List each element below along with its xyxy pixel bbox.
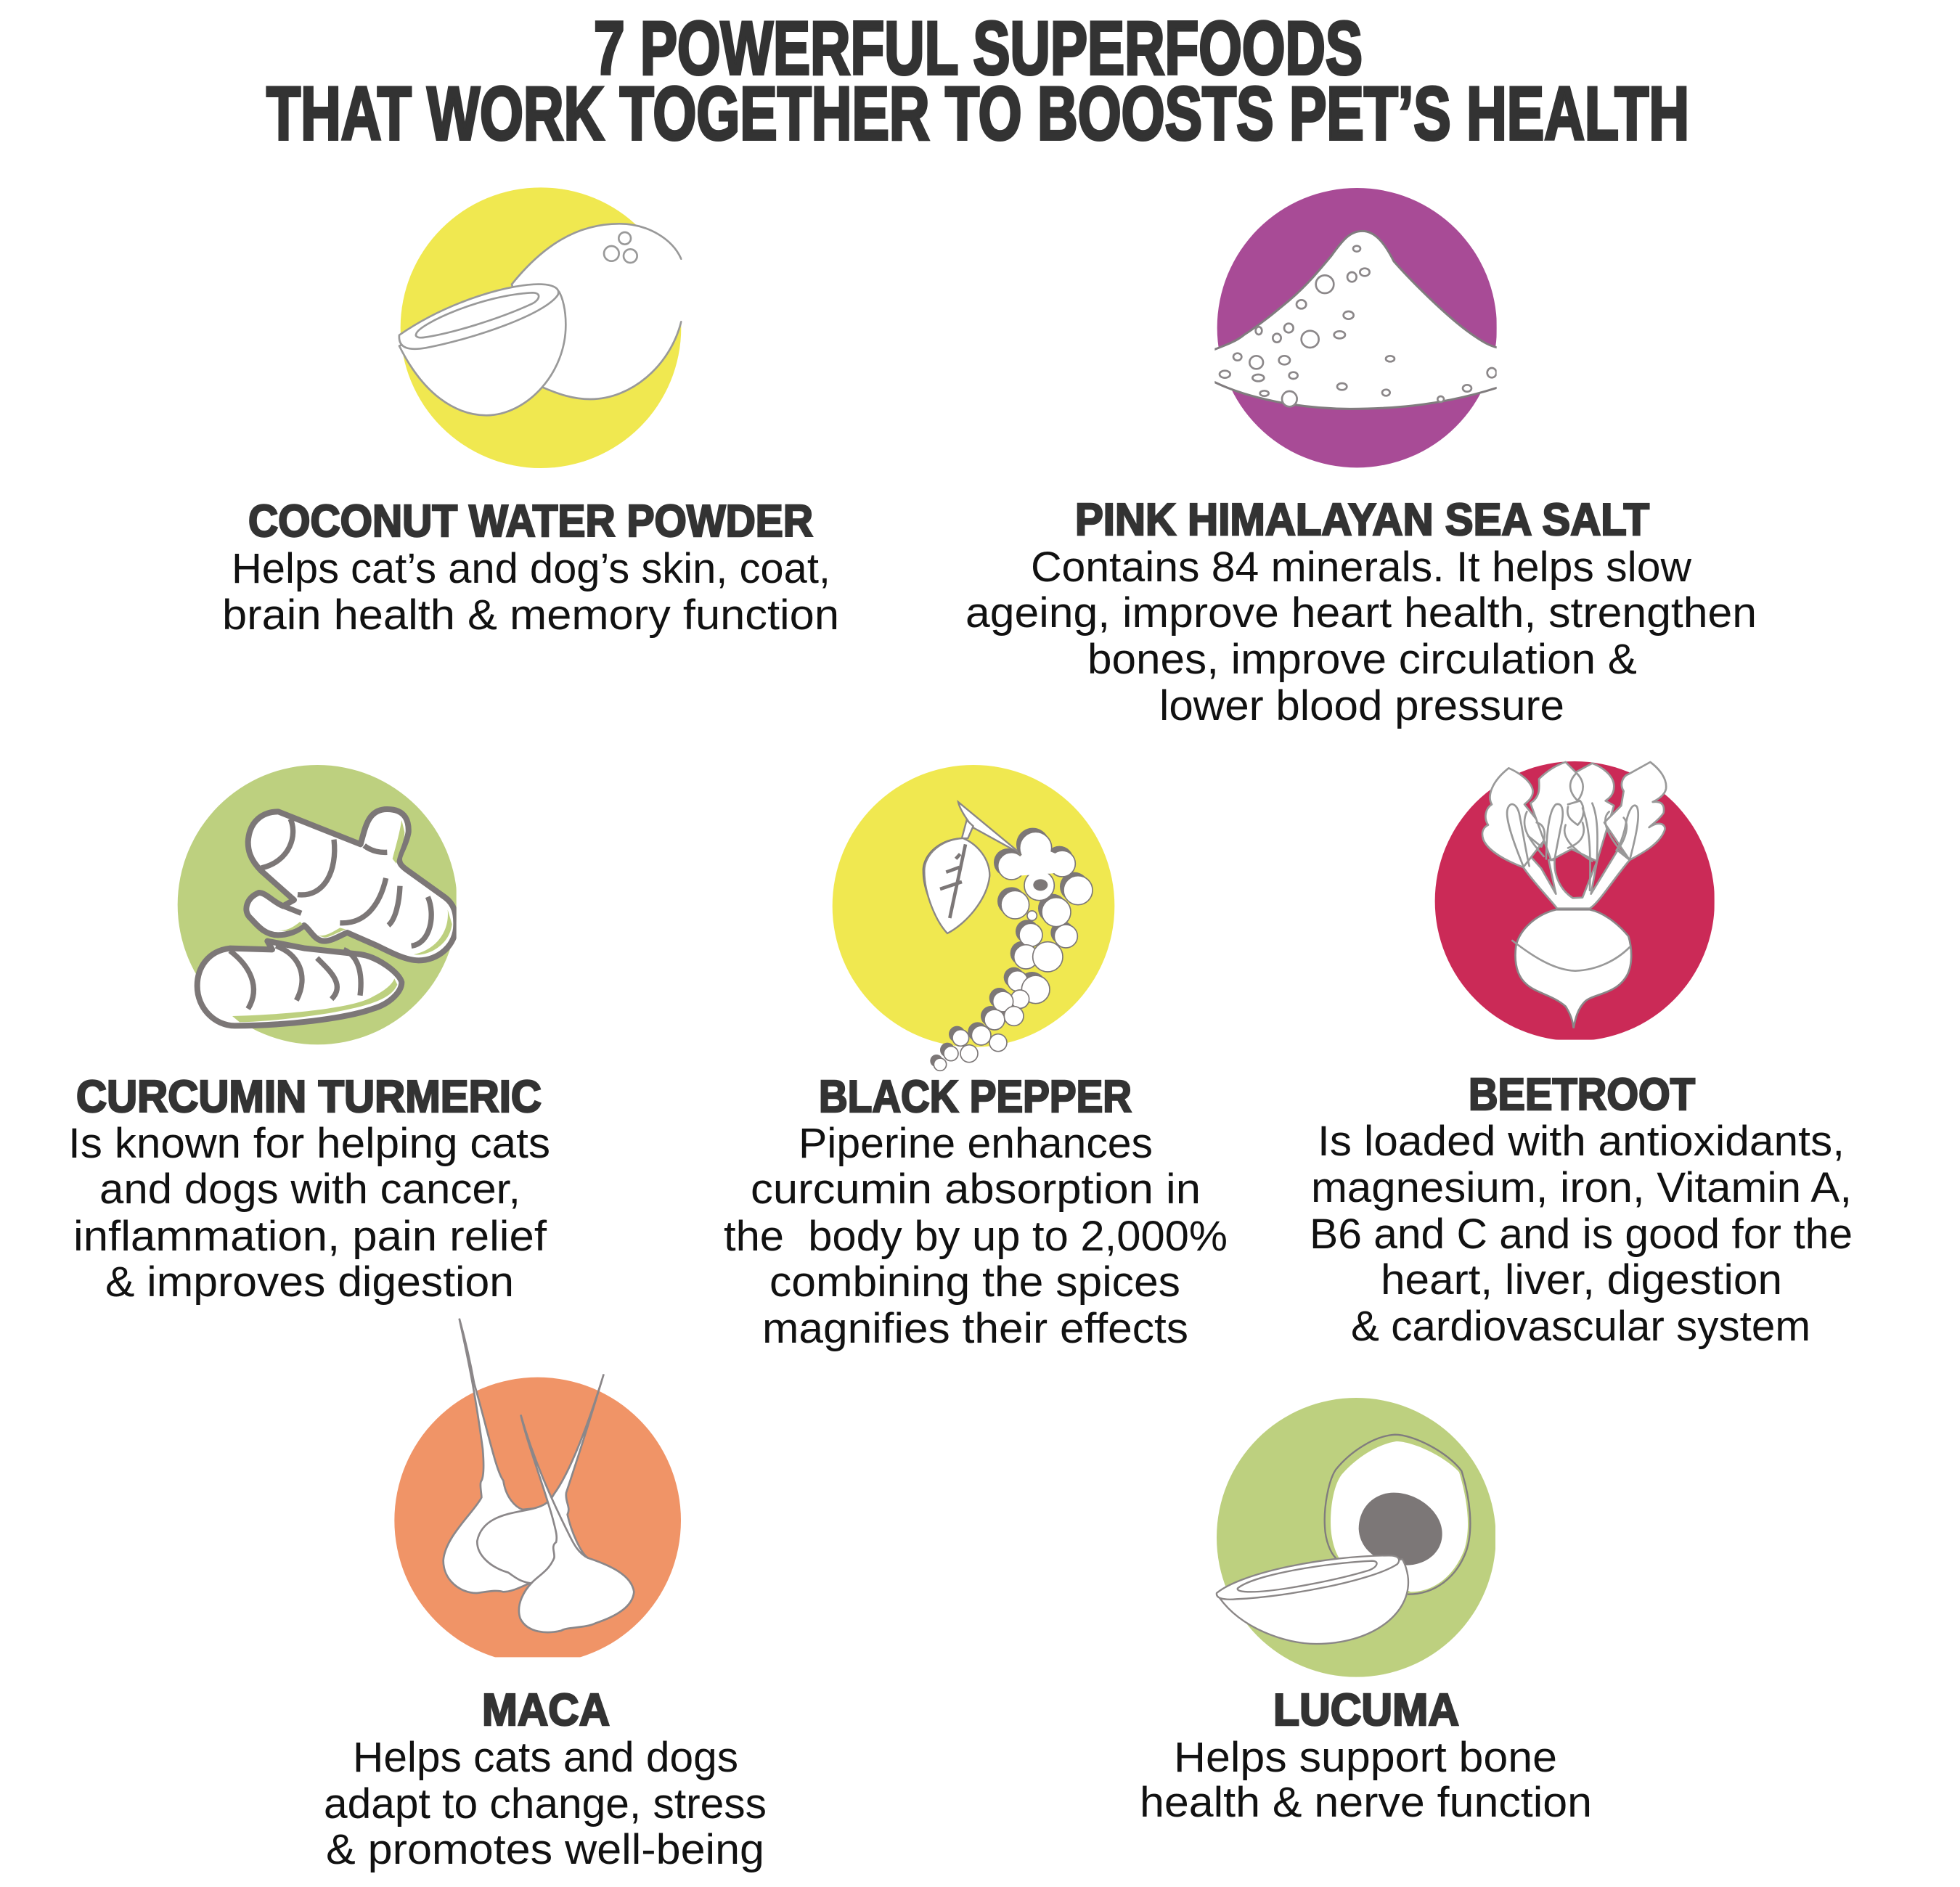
title: 7 POWERFUL SUPERFOODS [594, 7, 1363, 91]
heading: lucuma: LUCUMA [1273, 1685, 1459, 1735]
text: black pepper description: Piperine enhances [799, 1120, 1153, 1167]
text: beetroot description: heart, liver, digestion [1381, 1256, 1782, 1303]
text: pink himalayan sea salt description: Contains 84 minerals. It helps slow [1031, 544, 1692, 591]
icon: pepper branch [833, 765, 1114, 1071]
panel: maca [324, 1319, 767, 1873]
icon: maca roots [394, 1319, 681, 1663]
icon: turmeric roots [178, 765, 457, 1044]
text: pink himalayan sea salt description: bones, improve circulation & [1087, 636, 1637, 683]
panel: beetroot [1310, 761, 1853, 1350]
text: black pepper description [724, 1120, 1228, 1352]
heading: black pepper: BLACK PEPPER [819, 1072, 1132, 1122]
text: coconut water powder description: brain health & memory function [222, 592, 839, 639]
text: beetroot description [1310, 1118, 1853, 1350]
text: maca description: Helps cats and dogs [353, 1734, 738, 1781]
text: lucuma description: Helps support bone [1174, 1734, 1557, 1781]
berry bodies [934, 832, 1093, 1071]
text: black pepper description: combining the spices [769, 1258, 1180, 1306]
heading: pink himalayan sea salt: PINK HIMALAYAN SEA SALT [1075, 495, 1649, 545]
text: curcumin turmeric description [68, 1120, 550, 1306]
text: curcumin turmeric description: & improves digestion [105, 1258, 514, 1306]
heading: coconut water powder: COCONUT WATER POWDER [248, 496, 813, 547]
text: pink himalayan sea salt description: lower blood pressure [1159, 682, 1564, 729]
panel: coconut water powder [222, 187, 839, 639]
text: beetroot description: Is loaded with antioxidants, [1318, 1118, 1845, 1165]
panel: lucuma [1140, 1398, 1592, 1826]
text: maca description: & promotes well-being [326, 1826, 764, 1873]
heading: curcumin turmeric: CURCUMIN TURMERIC [76, 1072, 542, 1122]
text: curcumin turmeric description: inflammation, pain relief [73, 1213, 547, 1260]
text: lucuma description [1140, 1734, 1592, 1826]
text: coconut water powder description [222, 545, 839, 639]
text: beetroot description: B6 and C and is good for the [1310, 1211, 1853, 1258]
panel: curcumin turmeric [68, 765, 550, 1306]
text: curcumin turmeric description: and dogs with cancer, [99, 1166, 520, 1213]
icon: coconut [399, 187, 686, 468]
text: black pepper description: the body by up to 2,000% [724, 1213, 1228, 1260]
text: pink himalayan sea salt description: ageing, improve heart health, strengthen [965, 589, 1757, 636]
panel: pink himalayan sea salt [965, 188, 1757, 729]
text: maca description: adapt to change, stress [324, 1780, 767, 1827]
icon: beetroot [1435, 761, 1715, 1041]
heading: maca: MACA [482, 1685, 610, 1735]
title [266, 7, 1689, 156]
text: beetroot description: & cardiovascular system [1351, 1303, 1810, 1350]
text: beetroot description: magnesium, iron, Vitamin A, [1311, 1164, 1852, 1211]
text: coconut water powder description: Helps cat’s and dog’s skin, coat, [232, 545, 830, 592]
icon: lucuma fruit [1217, 1398, 1496, 1677]
text: black pepper description: magnifies their effects [762, 1305, 1188, 1352]
icon: salt pile [1212, 188, 1499, 467]
text: pink himalayan sea salt description [965, 544, 1757, 729]
panel: black pepper [724, 765, 1228, 1352]
text: black pepper description: curcumin absorption in [751, 1166, 1201, 1213]
text: curcumin turmeric description: Is known for helping cats [68, 1120, 550, 1167]
heading: beetroot: BEETROOT [1469, 1070, 1695, 1120]
text: lucuma description: health & nerve function [1140, 1779, 1592, 1826]
text: maca description [324, 1734, 767, 1873]
